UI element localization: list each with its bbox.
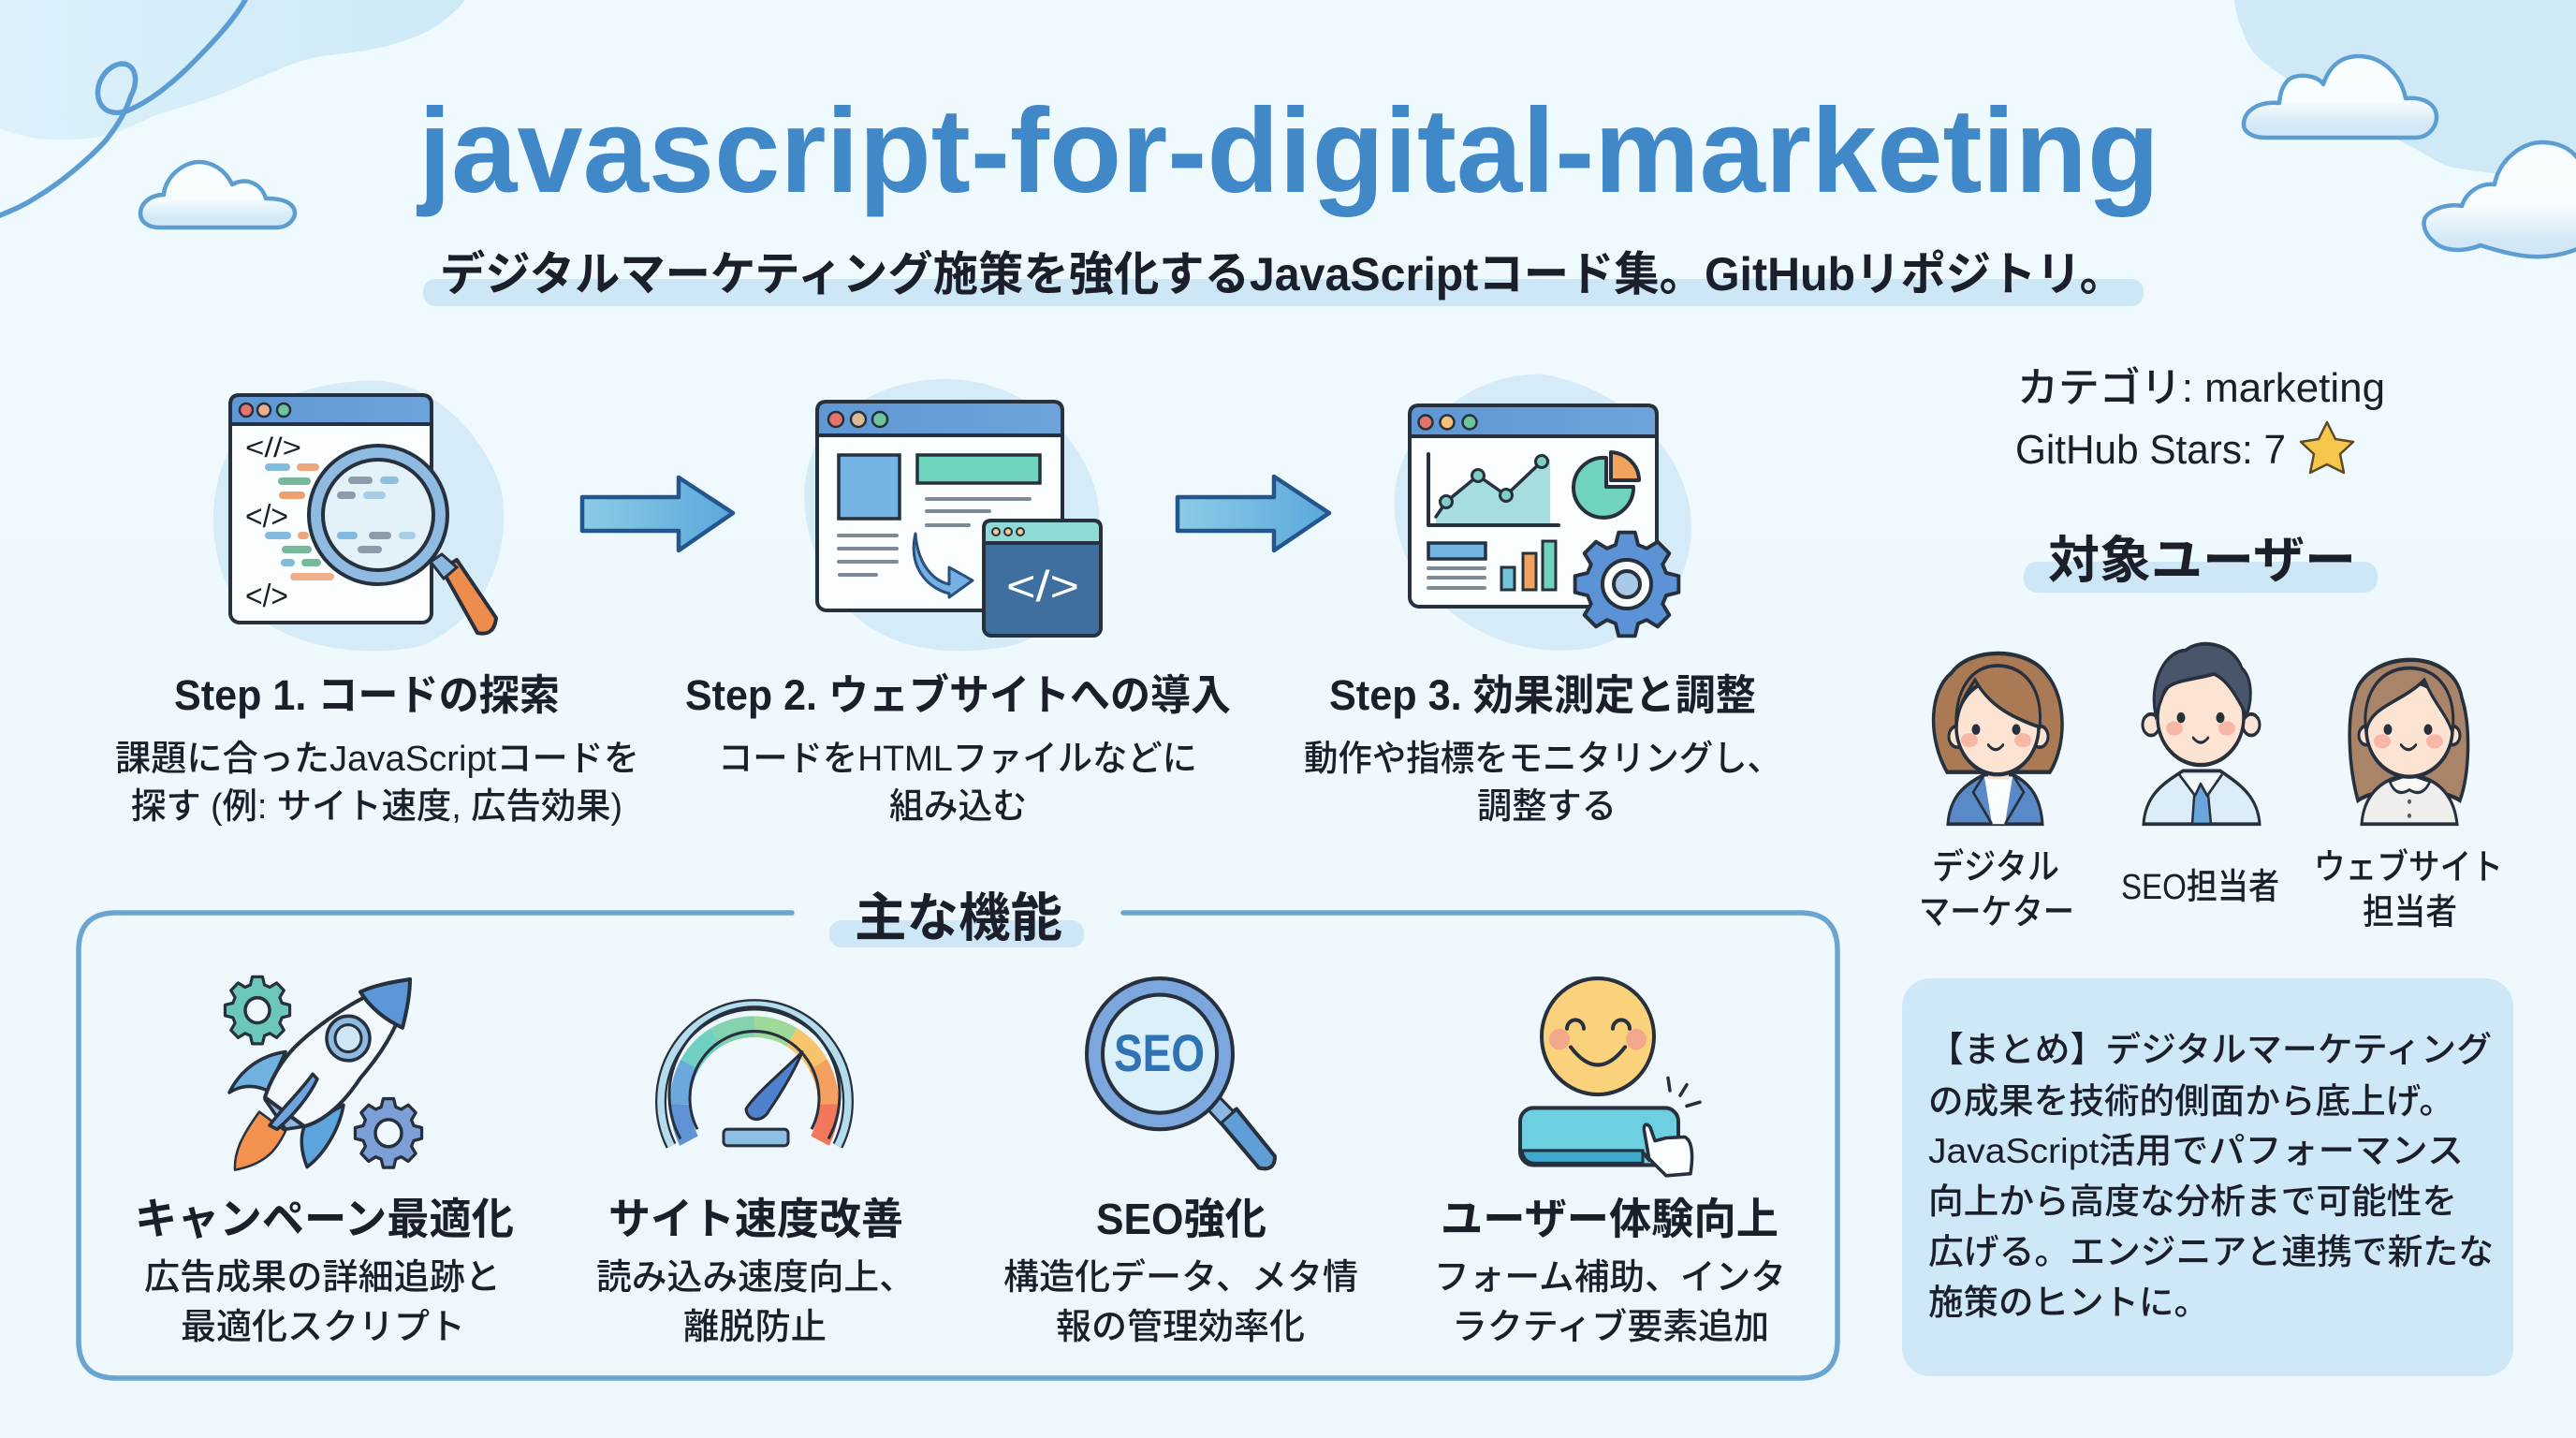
- text: summary body: 広げる。エンジニアと連携で新たな: [1928, 1232, 2494, 1271]
- watercolor blob: top right: [2234, 0, 2576, 183]
- label: digital marketer: マーケター: [1919, 893, 2074, 932]
- text: step 1 description: [115, 740, 639, 827]
- text: SEO description: 報の管理効率化: [1056, 1308, 1305, 1347]
- text: summary body: の成果を技術的側面から底上げ。: [1928, 1081, 2454, 1121]
- text: step 3 description: 動作や指標をモニタリングし、: [1304, 740, 1781, 779]
- heading: step 3: Step 3. 効果測定と調整: [1329, 671, 1756, 719]
- heading: target users: 対象ユーザー: [2048, 533, 2356, 589]
- watercolor blob: top left: [0, 0, 465, 140]
- heading: SEO: SEO強化: [1096, 1195, 1266, 1243]
- panel: step 1: [115, 380, 639, 827]
- text: user experience description: フォーム補助、インタ: [1434, 1258, 1786, 1298]
- avatar: woman in blue jacket: [1934, 653, 2062, 824]
- user: website staff: [2314, 660, 2503, 932]
- text: step 2 description: 組み込む: [889, 787, 1027, 827]
- panel: step 2: [685, 379, 1231, 827]
- label: website staff: 担当者: [2363, 893, 2457, 932]
- cloud: left: [140, 162, 295, 227]
- text: step 3 description: 調整する: [1477, 787, 1617, 827]
- label: digital marketer: デジタル: [1932, 848, 2059, 888]
- text: summary body: [1928, 1030, 2494, 1322]
- avatar: man with tie: [2143, 644, 2260, 824]
- icon: star: [2301, 422, 2353, 473]
- user: SEO staff: [2121, 644, 2279, 907]
- icon: speedometer: [661, 1005, 848, 1146]
- text: category: カテゴリ: marketing: [2017, 365, 2385, 411]
- text: step 1 description: 探す (例: サイト速度, 広告効果): [131, 787, 622, 827]
- text: site speed description: 離脱防止: [683, 1308, 827, 1347]
- label: website staff: [2314, 848, 2503, 932]
- text: SEO description: 構造化データ、メタ情: [1003, 1258, 1358, 1298]
- icon: website with code embed: </>: [1006, 562, 1079, 610]
- panel border: [79, 913, 1837, 1378]
- panel: main features: [79, 888, 1837, 1378]
- cloud: top right: [2244, 56, 2437, 138]
- heading: step 2: Step 2. ウェブサイトへの導入: [685, 671, 1231, 719]
- label: website staff: ウェブサイト: [2314, 848, 2503, 888]
- text: user experience description: ラクティブ要素追加: [1452, 1308, 1769, 1347]
- subtitle: デジタルマーケティング施策を強化するJavaScriptコード集。GitHubリポジトリ。: [440, 248, 2125, 301]
- text: step 1 description: 課題に合ったJavaScriptコードを: [115, 740, 639, 779]
- icon: SEO magnifier: SEO: [1114, 1023, 1205, 1082]
- feature: campaign optimization: [135, 976, 514, 1347]
- feature: user experience: [1434, 978, 1786, 1347]
- icon: code window with magnifier: </>: [245, 499, 288, 535]
- panel: summary: [1902, 978, 2513, 1376]
- icon: website with code embed: [804, 379, 1101, 651]
- panel: target users: [1919, 533, 2503, 932]
- text: step 2 description: コードをHTMLファイルなどに: [718, 740, 1197, 779]
- icon: SEO magnifier: [1087, 978, 1275, 1168]
- heading: user experience: ユーザー体験向上: [1441, 1195, 1778, 1243]
- arrow: step 1 to 2: [582, 477, 733, 550]
- text: SEO description: [1003, 1258, 1358, 1347]
- text: campaign description: 最適化スクリプト: [181, 1308, 465, 1347]
- arrow: step 2 to 3: [1178, 477, 1329, 550]
- text: GitHub stars: GitHub Stars: 7: [2015, 427, 2286, 473]
- heading: step 1: Step 1. コードの探索: [174, 671, 560, 719]
- heading: campaign optimization: キャンペーン最適化: [135, 1195, 514, 1243]
- label: SEO staff: SEO担当者: [2121, 868, 2279, 907]
- text: summary body: 【まとめ】デジタルマーケティング: [1928, 1030, 2492, 1069]
- panel: repository meta: [2015, 365, 2385, 473]
- user: digital marketer: [1919, 653, 2074, 932]
- text: site speed description: [596, 1258, 915, 1347]
- feature: SEO: [1003, 978, 1358, 1347]
- text: step 2 description: [718, 740, 1197, 827]
- text: campaign description: 広告成果の詳細追跡と: [144, 1258, 501, 1298]
- text: summary body: 施策のヒントに。: [1928, 1283, 2209, 1322]
- text: site speed description: 読み込み速度向上、: [596, 1258, 915, 1298]
- icon: code window with magnifier: [213, 380, 504, 651]
- feature: site speed: [596, 1005, 915, 1347]
- avatar: woman with long hair: [2349, 660, 2468, 824]
- icon: analytics dashboard with gear: [1395, 374, 1691, 651]
- icon: rocket and gears: [225, 976, 422, 1170]
- label: digital marketer: [1919, 848, 2074, 932]
- text: step 3 description: [1304, 740, 1781, 827]
- text: campaign description: [144, 1258, 501, 1347]
- icon: code window with magnifier: <//>: [245, 433, 301, 463]
- icon: smiley and button: [1520, 978, 1700, 1176]
- heading: main features: 主な機能: [855, 888, 1062, 947]
- text: user experience description: [1434, 1258, 1786, 1347]
- title: javascript-for-digital-marketing: [417, 84, 2159, 218]
- icon: code window with magnifier: </>: [245, 579, 288, 614]
- cloud: right edge: [2424, 142, 2576, 257]
- heading: site speed: サイト速度改善: [608, 1195, 903, 1243]
- text: summary body: JavaScript活用でパフォーマンス: [1928, 1131, 2464, 1170]
- text: summary body: 向上から高度な分析まで可能性を: [1928, 1181, 2457, 1221]
- decorative looping line: [0, 0, 245, 215]
- panel: step 3: [1304, 374, 1781, 827]
